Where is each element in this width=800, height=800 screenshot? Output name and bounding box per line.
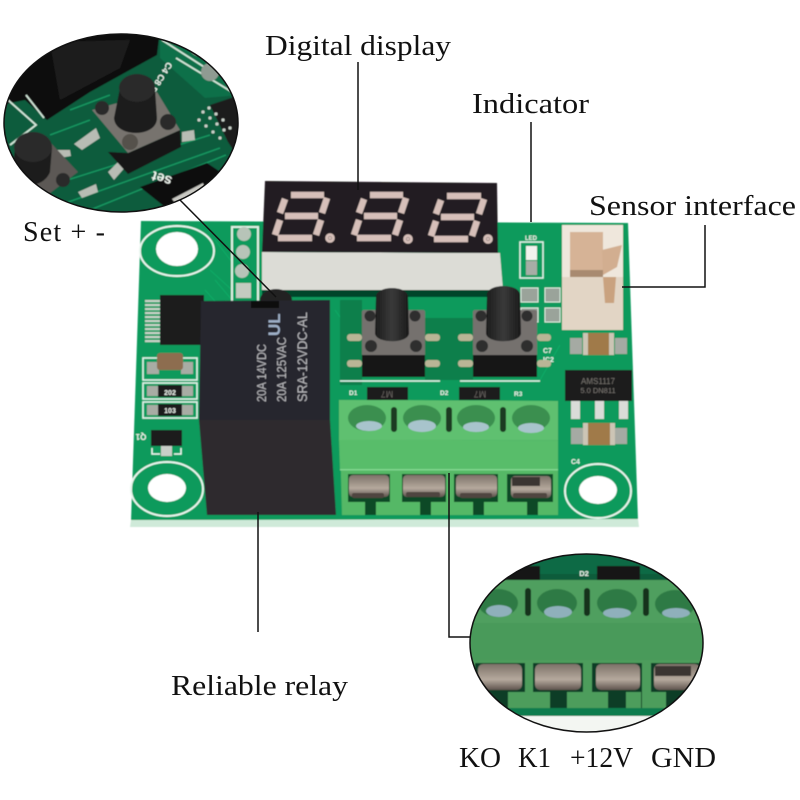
relay bbox=[199, 289, 336, 515]
label: KO: KO bbox=[459, 743, 501, 774]
relay markings: 20A 14VDC bbox=[255, 344, 269, 402]
leader line: sensor interface bbox=[622, 225, 705, 287]
main button bbox=[108, 130, 181, 174]
board silk labels bbox=[349, 348, 580, 466]
digit 1 bbox=[275, 195, 332, 240]
label: +12V: +12V bbox=[570, 743, 633, 774]
button left bbox=[347, 288, 440, 377]
board silk labels: D1 bbox=[349, 390, 358, 397]
voltage regulator: AMS1117 bbox=[581, 377, 616, 386]
sensor connector bbox=[562, 225, 623, 330]
label: digital display: Digital display bbox=[265, 31, 451, 62]
digital display bbox=[262, 181, 503, 290]
relay front face bbox=[199, 420, 336, 515]
surface mount IC bbox=[145, 295, 204, 345]
label: reliable relay: Reliable relay bbox=[171, 671, 348, 702]
leader line: set button bbox=[180, 200, 276, 297]
leader line: relay bbox=[257, 512, 259, 632]
terminal labels bbox=[459, 743, 716, 774]
solder pads bbox=[55, 128, 195, 198]
set label strip bbox=[140, 162, 219, 206]
magnified callout: set button: set bbox=[149, 168, 174, 190]
magnified callout: set button bbox=[0, 30, 240, 220]
second button bbox=[36, 143, 78, 194]
label: set plus minus: Set + - bbox=[23, 217, 105, 248]
label: GND: GND bbox=[651, 743, 716, 774]
relay shadow in callout bbox=[0, 30, 160, 120]
mounting hole bottom left bbox=[131, 462, 203, 516]
diodes: M7 bbox=[474, 389, 486, 399]
indicator LED: LED bbox=[525, 236, 538, 242]
leader line: terminals bbox=[449, 473, 471, 637]
indicator LED bbox=[520, 236, 543, 278]
capacitor top bbox=[570, 333, 627, 355]
relay markings bbox=[255, 312, 310, 402]
mounting hole bottom right bbox=[565, 464, 631, 518]
board silk labels: IC2 bbox=[543, 357, 554, 364]
dark IC in callout bbox=[210, 97, 238, 148]
mounting hole top left bbox=[140, 226, 214, 276]
circuit board bbox=[130, 181, 639, 527]
relay markings: 20A 125VAC bbox=[275, 337, 289, 402]
small pads by indicator bbox=[521, 288, 560, 322]
display housing bbox=[262, 252, 503, 290]
board base bbox=[131, 221, 638, 522]
digit 2 bbox=[354, 195, 410, 240]
button right bbox=[458, 286, 551, 377]
label: sensor interface: Sensor interface bbox=[589, 191, 796, 222]
transistor Q1 bbox=[135, 430, 182, 456]
magnified callout: set button: C4 C8 R2 R1 bbox=[137, 60, 174, 111]
diodes: M7 bbox=[381, 389, 393, 399]
diodes bbox=[367, 387, 500, 400]
transistor Q1: Q1 bbox=[135, 432, 146, 441]
label: indicator: Indicator bbox=[472, 89, 590, 120]
relay markings: SRA-12VDC-AL bbox=[294, 312, 310, 402]
voltage regulator: 5.0 DN811 bbox=[580, 386, 616, 395]
resistors and capacitor, left: 103 bbox=[164, 408, 176, 415]
capacitor bottom bbox=[571, 423, 627, 445]
leader line: indicator bbox=[530, 122, 532, 222]
magnified callout: terminals: D2 bbox=[579, 569, 589, 578]
digit 3 bbox=[431, 196, 490, 240]
resistors and capacitor, left: 202 bbox=[164, 390, 176, 397]
resistors and capacitor, left bbox=[143, 353, 197, 418]
board silk labels: D2 bbox=[440, 390, 449, 397]
through-hole pads bbox=[232, 227, 258, 302]
board silk labels: C4 bbox=[571, 459, 580, 466]
board silk labels: R3 bbox=[514, 391, 523, 398]
board silk labels: C7 bbox=[543, 348, 552, 355]
magnified callout: terminals bbox=[465, 550, 710, 740]
relay markings: UL bbox=[265, 313, 284, 336]
leader line: digital display bbox=[357, 62, 359, 190]
relay top face bbox=[199, 300, 330, 420]
label: K1: K1 bbox=[518, 743, 551, 774]
voltage regulator bbox=[565, 370, 632, 419]
terminal block bbox=[339, 400, 558, 515]
